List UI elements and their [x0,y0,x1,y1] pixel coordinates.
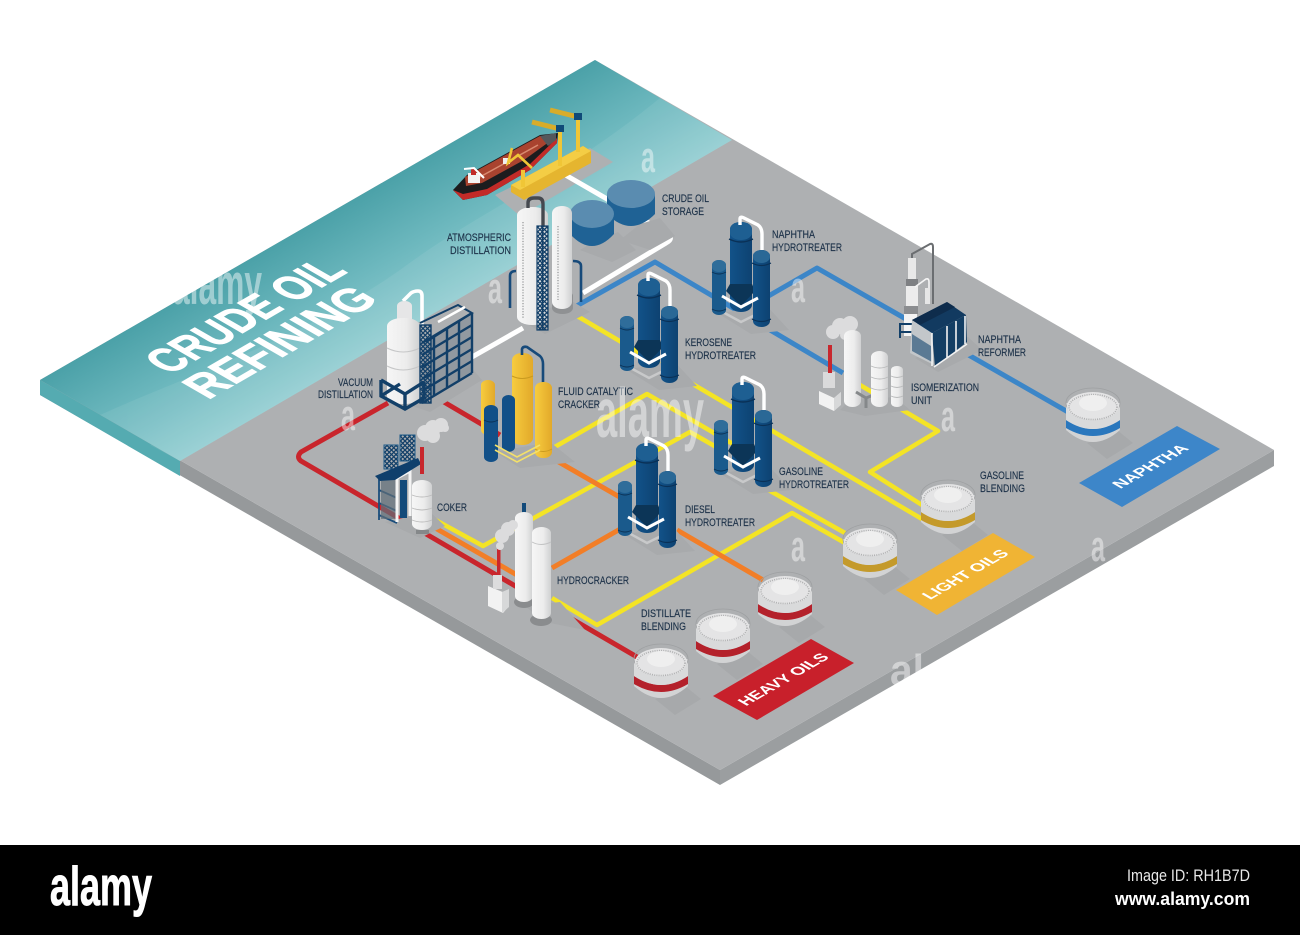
overhead pipe [403,291,422,325]
pipe: FCC out [553,394,733,448]
label: gasoline blending: GASOLINE [980,470,1024,482]
label: isomerization unit [911,382,979,407]
red heavy oil pipes [298,395,637,657]
label: kerosene hydrotreater: HYDROTREATER [685,350,756,362]
icon: fluid catalytic cracker [481,347,575,468]
pipe: gasoline main [572,313,922,519]
base shadow [520,300,590,334]
icon: coker [375,418,449,538]
label: gasoline blending [980,470,1025,495]
watermarks: alamy [172,252,262,317]
watermarks: a [641,133,655,182]
small platform [856,392,876,408]
label: naphtha hydrotreater: HYDROTREATER [772,242,842,254]
badge: heavy oils: HEAVY OILS [735,651,834,708]
column rungs [523,222,558,318]
label: naphtha reformer: REFORMER [978,347,1026,359]
label: gasoline hydrotreater: GASOLINE [779,466,823,478]
label: crude oil storage: STORAGE [662,206,704,218]
label: kerosene hydrotreater: KEROSENE [685,337,732,349]
label: fluid catalytic cracker [558,386,633,411]
icon: diesel hydrotreater [618,438,695,555]
gray flue pipe [912,244,933,304]
tower [904,258,930,336]
lattice towers [384,435,415,469]
icon: distillate tank 3 [758,572,825,643]
watermarks: a [941,392,955,441]
watermarks: a [791,263,805,312]
tanker waterline [453,138,557,200]
tall column [844,330,861,407]
icon: distillate tank 1 [634,644,701,715]
pipe: hydrocracker out [552,513,845,625]
tank front [570,200,636,262]
chimney [497,547,500,575]
chimney [420,447,424,474]
vessel seams [387,348,420,370]
label: isomerization unit: UNIT [911,395,932,407]
loading hose [508,148,532,168]
furnace box [819,372,841,411]
label: naphtha reformer [978,334,1026,359]
label: fluid catalytic cracker: CRACKER [558,399,600,411]
label: isomerization unit: ISOMERIZATION [911,382,979,394]
rear column [515,512,533,602]
pipe: FCC to diesel [550,457,763,580]
platform left side [40,380,720,785]
label: diesel hydrotreater: HYDROTREATER [685,517,755,529]
front blue column [484,405,498,462]
column base [514,596,552,626]
small stacked drum [891,366,903,407]
left yellow column [481,380,495,435]
tanker bridge [464,168,484,183]
dock slab [495,148,613,216]
watermarks [172,133,1105,695]
furnace box [488,575,509,613]
label: atmospheric distillation [447,232,511,257]
base frame [495,445,540,462]
pipe: hydrocracker to diesel [552,528,622,568]
tanker hull [453,133,558,200]
platform right side [720,450,1274,785]
right yellow column [535,382,552,458]
pipe: vacuum to cracker [432,395,500,435]
title [134,251,390,406]
drum [412,480,432,534]
front column [532,527,551,619]
label: vacuum distillation: DISTILLATION [318,389,373,401]
water side [40,380,180,476]
pipe: coker out [430,432,725,546]
label: gasoline hydrotreater [779,466,849,491]
label: diesel hydrotreater: DIESEL [685,504,715,516]
icon: light oil tank 1 [843,524,910,595]
panel: refinery platform [40,60,1274,785]
title line: crude oil: CRUDE OIL [134,251,358,381]
water surface [40,60,732,461]
main column [517,207,548,325]
footer logo: alamy [50,855,152,917]
crane arms [532,110,578,129]
white frame [397,471,410,522]
chimney [828,345,832,373]
roof [912,302,966,333]
badge: heavy oils [713,639,854,720]
navy tip [522,503,526,514]
icon: naphtha hydrotreater [712,217,789,334]
badge: naphtha: NAPHTHA [1109,442,1193,491]
left wall window [912,334,932,362]
label: coker: COKER [437,502,467,514]
smoke [417,418,449,443]
shadow [840,397,910,416]
badge: naphtha [1079,426,1220,507]
label: gasoline hydrotreater: HYDROTREATER [779,479,849,491]
label: distillate blending [641,608,691,633]
site url: www.alamy.com [1114,889,1250,909]
pipe: coker to hydrocracker [430,525,517,575]
icon: isomerization unit [819,316,910,416]
vessel neck [397,301,412,331]
platform roof [375,458,421,481]
yellow light oil pipes [430,313,938,625]
shadow [915,337,982,372]
tanker deck [465,136,553,186]
structure legs [379,477,397,523]
orange pipes [430,457,763,580]
tanker stern [540,133,556,146]
watermarks: a [1091,522,1105,571]
vessel body [387,318,420,404]
icon: oil tanker [453,133,558,200]
label: crude oil storage [662,193,709,218]
icon: crude storage tanks [570,180,675,262]
footer bar [0,845,1300,935]
pipe: to naphtha tank [765,268,1068,412]
second column base [552,290,573,314]
badge: light oils [896,533,1035,615]
watermarks: alamy [596,374,704,452]
navy frame [900,324,912,338]
lattice structure [420,305,472,403]
title line: refining: REFINING [172,279,390,406]
label: kerosene hydrotreater [685,337,756,362]
pier body [511,146,591,200]
icon: naphtha tank [1066,388,1133,459]
stacked drum [871,351,888,407]
icon: hydrocracker [488,503,585,630]
label: crude oil storage: CRUDE OIL [662,193,709,205]
icon: kerosene hydrotreater [620,273,697,390]
watermarks: a [791,522,805,571]
label: fluid catalytic cracker: FLUID CATALYTIC [558,386,633,398]
label: diesel hydrotreater [685,504,755,529]
pipe: gasoline hydrotreater out [740,474,845,533]
lattice tower [537,226,548,330]
label: atmospheric distillation: DISTILLATION [450,245,511,257]
watermarks: al [890,646,924,695]
blue column [502,395,515,452]
icon: atmospheric distillation [510,198,590,334]
side pipes [510,261,581,308]
icon: gasoline tank [921,480,988,551]
label: gasoline blending: BLENDING [980,483,1025,495]
crane columns [523,118,578,187]
icon: loading pier [508,110,591,200]
label: naphtha hydrotreater [772,229,842,254]
overhead pipe [522,347,543,383]
base shadow [495,442,575,468]
pipe: isomerization out [860,385,938,505]
main yellow column [512,353,533,445]
badge: light oils: LIGHT OILS [919,547,1014,602]
label: vacuum distillation: VACUUM [338,377,373,389]
shadow [525,602,585,630]
base shadow [400,366,482,412]
left wall [910,320,934,365]
watermarks: a [341,391,355,440]
tank back [607,180,675,250]
wall ribs [932,316,967,367]
ground surface [40,60,1274,770]
watermarks: a [488,264,502,313]
overhead pipe [528,198,543,227]
label: vacuum distillation [318,377,373,401]
smoke [826,316,858,340]
icon: distillate tank 2 [696,609,763,680]
pier top [511,146,591,190]
label: distillate blending: BLENDING [641,621,686,633]
blue naphtha pipes [573,262,1068,412]
pipe: vacuum to coker and tank [298,403,637,657]
platform frame [381,380,424,409]
icon: naphtha reformer [900,244,982,372]
pipe: hydrotreater feed [573,262,843,373]
icon: vacuum distillation [381,291,482,412]
icon: gasoline hydrotreater [714,377,791,494]
label: hydrocracker: HYDROCRACKER [557,575,629,587]
right wall [932,315,967,367]
image id: Image ID: RH1B7D [1127,866,1250,885]
smoke [495,520,518,550]
white crude pipes [472,173,670,357]
label: naphtha reformer: NAPHTHA [978,334,1022,346]
label: atmospheric distillation: ATMOSPHERIC [447,232,511,244]
label: distillate blending: DISTILLATE [641,608,691,620]
water waves [100,98,732,461]
shadow [385,512,445,538]
second column [552,206,572,309]
label: naphtha hydrotreater: NAPHTHA [772,229,816,241]
